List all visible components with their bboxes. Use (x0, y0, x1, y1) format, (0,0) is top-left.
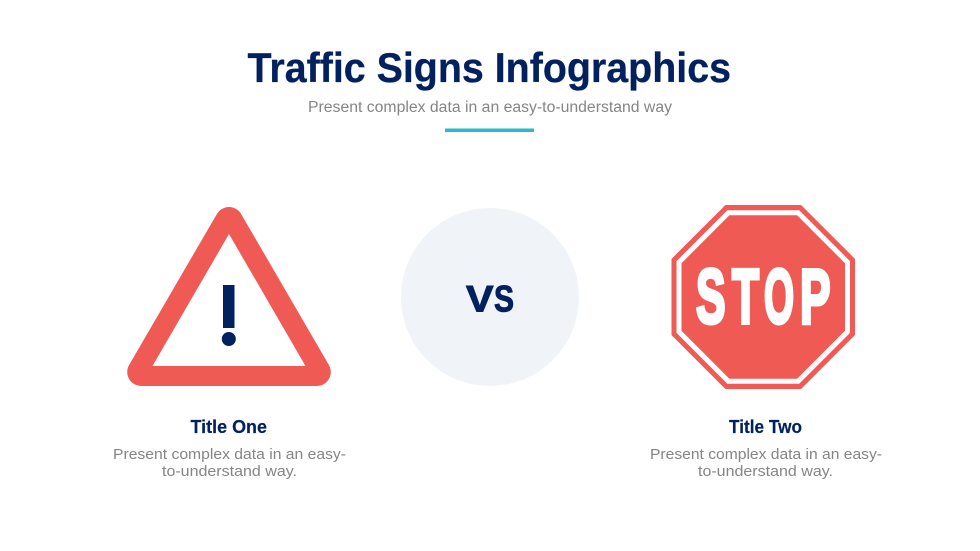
text block: title one: to-understand way. (162, 463, 297, 480)
text block: title one: Title One (190, 417, 267, 437)
text block: title one: Present complex data in an easy- (113, 446, 346, 463)
icon: stop sign: P (800, 254, 830, 340)
text block: title two (650, 417, 882, 480)
icon: stop sign (673, 206, 854, 388)
text block: title two: Present complex data in an easy- (650, 446, 882, 463)
text block: title one (113, 417, 346, 480)
vs circle: V (466, 278, 494, 320)
vs circle: S (494, 278, 514, 320)
icon: stop sign: S (696, 254, 726, 340)
icon: stop sign: O (764, 254, 794, 340)
title: Traffic Signs Infographics (248, 44, 731, 91)
text block: title two: Title Two (729, 417, 802, 437)
subtitle: Present complex data in an easy-to-understand way (308, 99, 672, 116)
text block: title two: to-understand way. (698, 463, 833, 480)
title accent underline (445, 128, 534, 132)
vs circle (401, 208, 579, 386)
icon: stop sign: T (732, 254, 759, 340)
icon: warning triangle (141, 221, 317, 372)
